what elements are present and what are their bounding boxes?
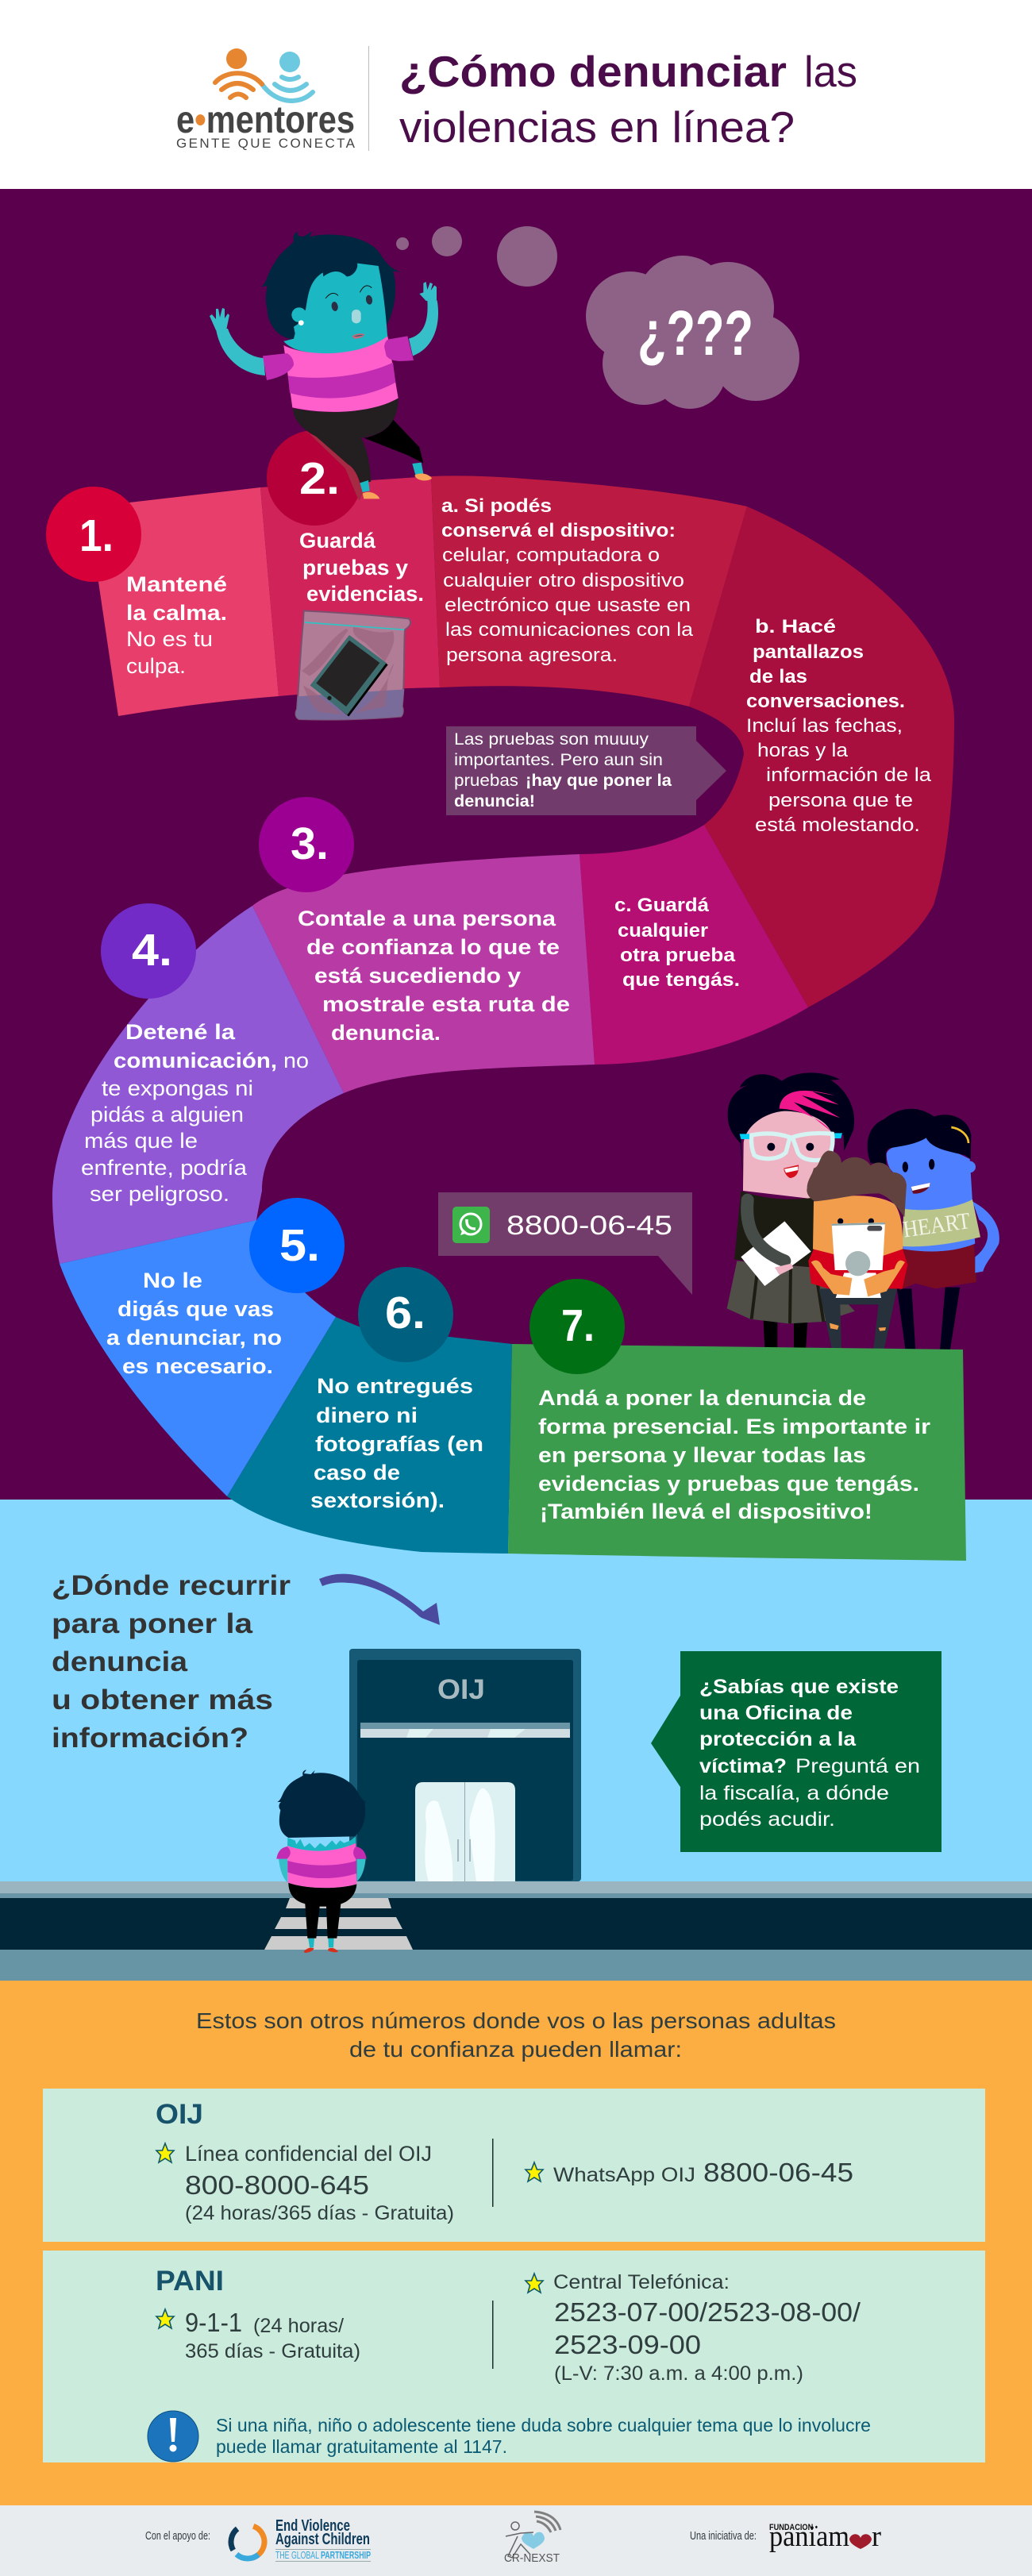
- heading: dónde recurrir: u obtener más: [52, 1685, 273, 1715]
- panel: PANI: 2523-07-00/2523-08-00/: [554, 2297, 861, 2327]
- step 5 text: a denunciar, no: [106, 1326, 282, 1350]
- heading: dónde recurrir: información?: [52, 1723, 248, 1754]
- step 1 text: No es tu: [126, 627, 213, 651]
- segment 6: [227, 1317, 512, 1554]
- footer: con el apoyo de: End Violence: [275, 2517, 350, 2535]
- intro text: otros números: [196, 2008, 836, 2062]
- thought bubbles: [396, 226, 557, 287]
- callout: pruebas: importantes. Pero aun sin: [454, 751, 663, 769]
- character: left arm of boy: [210, 308, 265, 375]
- step 1 number: [46, 487, 141, 582]
- step 3 number: [259, 797, 354, 892]
- segment 2c: [580, 825, 808, 1065]
- step 2b text: horas y la: [757, 740, 849, 761]
- building: OIJ: OIJ: [437, 1674, 485, 1705]
- footer: CR-NEXST logo: [504, 2512, 560, 2565]
- step 5 number: 5.: [279, 1220, 320, 1271]
- panel: OIJ: 8800-06-45: [703, 2158, 853, 2187]
- callout: oficina de protección: protección a la: [699, 1728, 857, 1750]
- icon: info: [148, 2411, 198, 2462]
- footer: con el apoyo de: THE GLOBAL: [275, 2549, 319, 2561]
- logo: e-mentores: GENTE QUE CONECTA: [176, 136, 356, 151]
- panel: PANI: (24 horas/: [253, 2315, 344, 2337]
- step 1 text: la calma.: [126, 601, 227, 625]
- footer: una iniciativa de paniamor: [690, 2520, 881, 2553]
- step 4 text: te expongas ni: [102, 1076, 253, 1100]
- person: boy with phone: [807, 1150, 907, 1351]
- step 2b text: de las: [749, 666, 807, 687]
- panel: PANI: 365 días - Gratuita): [185, 2340, 360, 2362]
- step 2a text: las comunicaciones con la: [445, 619, 694, 641]
- step 7 text: Andá a poner la denuncia de: [538, 1386, 866, 1410]
- panel: OIJ: (24 horas/365 días - Gratuita): [185, 2202, 454, 2224]
- footer: con el apoyo de: Con el apoyo de:: [145, 2529, 210, 2543]
- heading: dónde recurrir: para poner la: [52, 1608, 253, 1639]
- callout: pruebas: denuncia!: [454, 792, 535, 811]
- callout: pruebas: [446, 726, 726, 815]
- segment 1: [98, 487, 279, 716]
- step 2 number: 2.: [299, 453, 340, 504]
- step 2b text: pantallazos: [753, 641, 864, 663]
- intro text: otros números: de tu confianza pueden llamar:: [349, 2037, 682, 2062]
- thought cloud with question marks: [586, 256, 799, 409]
- street and crosswalk: [0, 1881, 1032, 1981]
- step 7 text: en persona y llevar todas las: [538, 1443, 866, 1467]
- person: blue: [868, 1109, 999, 1351]
- step 4 text: comunicación,: [114, 1049, 277, 1072]
- step 7 text: ¡También llevá el dispositivo!: [540, 1500, 872, 1523]
- segment 3: [252, 854, 595, 1093]
- thought cloud with question marks: ¿???: [637, 298, 753, 368]
- note text: puede llamar gratuitamente al 1147.: [216, 2436, 507, 2457]
- character: boy thinking: [260, 232, 438, 500]
- callout: oficina de protección: ¿Sabías que existe: [699, 1676, 899, 1698]
- step 4 text: pidás a alguien: [90, 1103, 244, 1126]
- panel: PANI: 2523-09-00: [554, 2330, 701, 2359]
- step 6 number: [358, 1267, 453, 1362]
- step 2 number: [267, 430, 362, 526]
- step 2b text: conversaciones.: [746, 691, 905, 712]
- step 3 text: denuncia.: [331, 1021, 441, 1045]
- step 5 text: [106, 1269, 282, 1378]
- logo: e-mentores: [176, 48, 356, 151]
- step path: lower segments: [227, 1317, 966, 1561]
- step 3 text: Contale a una persona: [298, 907, 556, 930]
- step 6 number: 6.: [385, 1288, 426, 1338]
- panel: PANI: (L-V: 7:30 a.m. a 4:00 p.m.): [554, 2362, 803, 2385]
- step 4 text: no: [283, 1049, 309, 1072]
- callout: oficina de protección: una Oficina de: [699, 1702, 853, 1724]
- step 7 text: [538, 1386, 931, 1523]
- arrow: [319, 1574, 440, 1625]
- callout: oficina de protección: la fiscalía, a dónde: [699, 1782, 889, 1804]
- panel: OIJ: [43, 2089, 985, 2242]
- step 2a text: conservá el dispositivo:: [441, 520, 676, 541]
- panel: OIJ: WhatsApp OIJ: [553, 2164, 695, 2186]
- step 2c text: c. Guardá: [614, 895, 710, 916]
- step 3 number: 3.: [291, 818, 329, 869]
- step 6 text: sextorsión).: [310, 1488, 445, 1512]
- step 7 text: evidencias y pruebas que tengás.: [538, 1472, 919, 1496]
- step 5 number: [249, 1198, 345, 1293]
- footer: una iniciativa de paniamor: FUNDACION •: [769, 2523, 818, 2532]
- step 4 text: enfrente, podría: [81, 1156, 248, 1180]
- step 5 text: digás que vas: [117, 1297, 274, 1321]
- footer: una iniciativa de paniamor: Una iniciativa de:: [690, 2529, 757, 2543]
- panel: OIJ: 800-8000-645: [185, 2170, 369, 2200]
- footer: con el apoyo de: Against Children: [275, 2531, 370, 2548]
- step 2b text: está molestando.: [755, 814, 920, 836]
- person: blue: HEART: [902, 1208, 972, 1243]
- step 2a text: electrónico que usaste en: [445, 595, 691, 616]
- heading: dónde recurrir: [52, 1570, 291, 1754]
- step 3 text: [298, 907, 570, 1045]
- segment 2a: [431, 476, 747, 707]
- step 1 text: [126, 572, 227, 678]
- step 2c text: que tengás.: [622, 969, 740, 991]
- step 6 text: No entregués: [317, 1374, 473, 1398]
- step 4 text: ser peligroso.: [90, 1182, 229, 1206]
- step 1 text: culpa.: [126, 654, 186, 678]
- step 5 text: es necesario.: [122, 1354, 273, 1378]
- step 3 text: mostrale esta ruta de: [322, 992, 570, 1016]
- icon: bagged tablet: [295, 610, 410, 720]
- note text: Si una niña, niño o adolescente tiene duda sobre cualquier tema que lo involucre: [216, 2415, 871, 2435]
- panel: OIJ: OIJ: [156, 2099, 203, 2130]
- step 4 number: [101, 903, 196, 999]
- step 2b text: b. Hacé: [755, 616, 836, 637]
- step 6 text: caso de: [314, 1461, 400, 1484]
- step 2 text: evidencias.: [306, 582, 424, 606]
- segment 5: [60, 1220, 336, 1496]
- footer: con el apoyo de: PARTNERSHIP: [321, 2549, 371, 2561]
- step 1 number: 1.: [79, 510, 114, 561]
- callout: whatsapp number: [438, 1192, 692, 1295]
- panel: PANI: PANI: [156, 2266, 224, 2297]
- callout: oficina de protección: víctima?: [699, 1755, 787, 1777]
- step 6 text: fotografías (en: [315, 1432, 483, 1456]
- heading: dónde recurrir: ¿Dónde recurrir: [52, 1570, 291, 1601]
- building: OIJ: [349, 1649, 581, 1881]
- step 1 text: Mantené: [126, 572, 227, 596]
- step 2b text: información de la: [766, 764, 932, 786]
- title: ¿Cómo denunciar: [399, 47, 787, 96]
- step 7 text: forma presencial. Es importante ir: [538, 1415, 931, 1438]
- panel: PANI: Central Telefónica:: [553, 2271, 730, 2293]
- step 2c text: otra prueba: [620, 945, 736, 966]
- step 3 text: está sucediendo y: [314, 964, 521, 988]
- step 4 text: [81, 1020, 309, 1206]
- callout: pruebas: ¡hay que poner la: [526, 772, 672, 790]
- step 7 number: [529, 1279, 625, 1374]
- step 2b text: persona que te: [768, 790, 913, 811]
- title: [399, 47, 857, 152]
- callout: oficina de protección: Preguntá en: [795, 1755, 920, 1777]
- step 4 text: más que le: [84, 1129, 198, 1153]
- step 6 text: [310, 1374, 483, 1512]
- title: violencias en línea?: [399, 102, 795, 152]
- step 2b text: Incluí las fechas,: [746, 715, 903, 737]
- segment 4: [52, 906, 344, 1264]
- step 2a text: [441, 495, 694, 666]
- segment 2: [260, 476, 440, 696]
- logo: e-mentores: e•mentores: [176, 99, 355, 141]
- note text: [216, 2415, 871, 2457]
- step 6 text: dinero ni: [316, 1404, 418, 1427]
- step 2a text: persona agresora.: [446, 645, 618, 666]
- callout: oficina de protección: [651, 1651, 942, 1852]
- step 2c text: cualquier: [618, 920, 708, 941]
- callout: pruebas: Las pruebas son muuuy: [454, 730, 649, 749]
- people group: [727, 1072, 999, 1351]
- title: las: [804, 47, 857, 96]
- person: woman: [727, 1072, 855, 1350]
- icon: whatsapp: [452, 1207, 490, 1243]
- heading: dónde recurrir: denuncia: [52, 1646, 188, 1677]
- character: person from behind: [276, 1769, 368, 1953]
- callout: whatsapp number: 8800-06-45: [506, 1211, 672, 1241]
- step 2a text: a. Si podés: [441, 495, 552, 517]
- footer: con el apoyo de: [145, 2517, 371, 2566]
- step 2 text: Guardá: [299, 529, 376, 553]
- footer: una iniciativa de paniamor: r: [872, 2520, 881, 2553]
- step 7 number: 7.: [561, 1300, 595, 1351]
- step 4 text: Detené la: [125, 1020, 236, 1044]
- footer: una iniciativa de paniamor: paniam: [769, 2520, 849, 2553]
- panel: OIJ: Línea confidencial del OIJ: [185, 2142, 432, 2166]
- step 4 number: 4.: [132, 925, 172, 976]
- footer: CR-NEXST logo: CR-NEXST: [504, 2551, 560, 2565]
- segment 2b: [689, 506, 954, 1007]
- step 5 text: No le: [143, 1269, 202, 1292]
- callout: oficina de protección: podés acudir.: [699, 1808, 835, 1831]
- intro text: otros números: Estos son otros números donde vos o las personas adultas: [196, 2008, 836, 2033]
- step 2 text: [299, 529, 424, 606]
- step 2b text: [746, 616, 932, 836]
- segment 7: [508, 1344, 966, 1561]
- step path: ruta de denuncia: [52, 476, 954, 1496]
- callout: pruebas: pruebas: [454, 772, 518, 790]
- panel: PANI: 9-1-1: [185, 2308, 242, 2337]
- step 3 text: de confianza lo que te: [306, 935, 560, 959]
- step 2 text: pruebas y: [302, 556, 408, 580]
- step 2a text: cualquier otro dispositivo: [443, 570, 684, 591]
- panel: PANI: [43, 2251, 985, 2462]
- step 2a text: celular, computadora o: [442, 545, 660, 566]
- step 2c text: [614, 895, 740, 991]
